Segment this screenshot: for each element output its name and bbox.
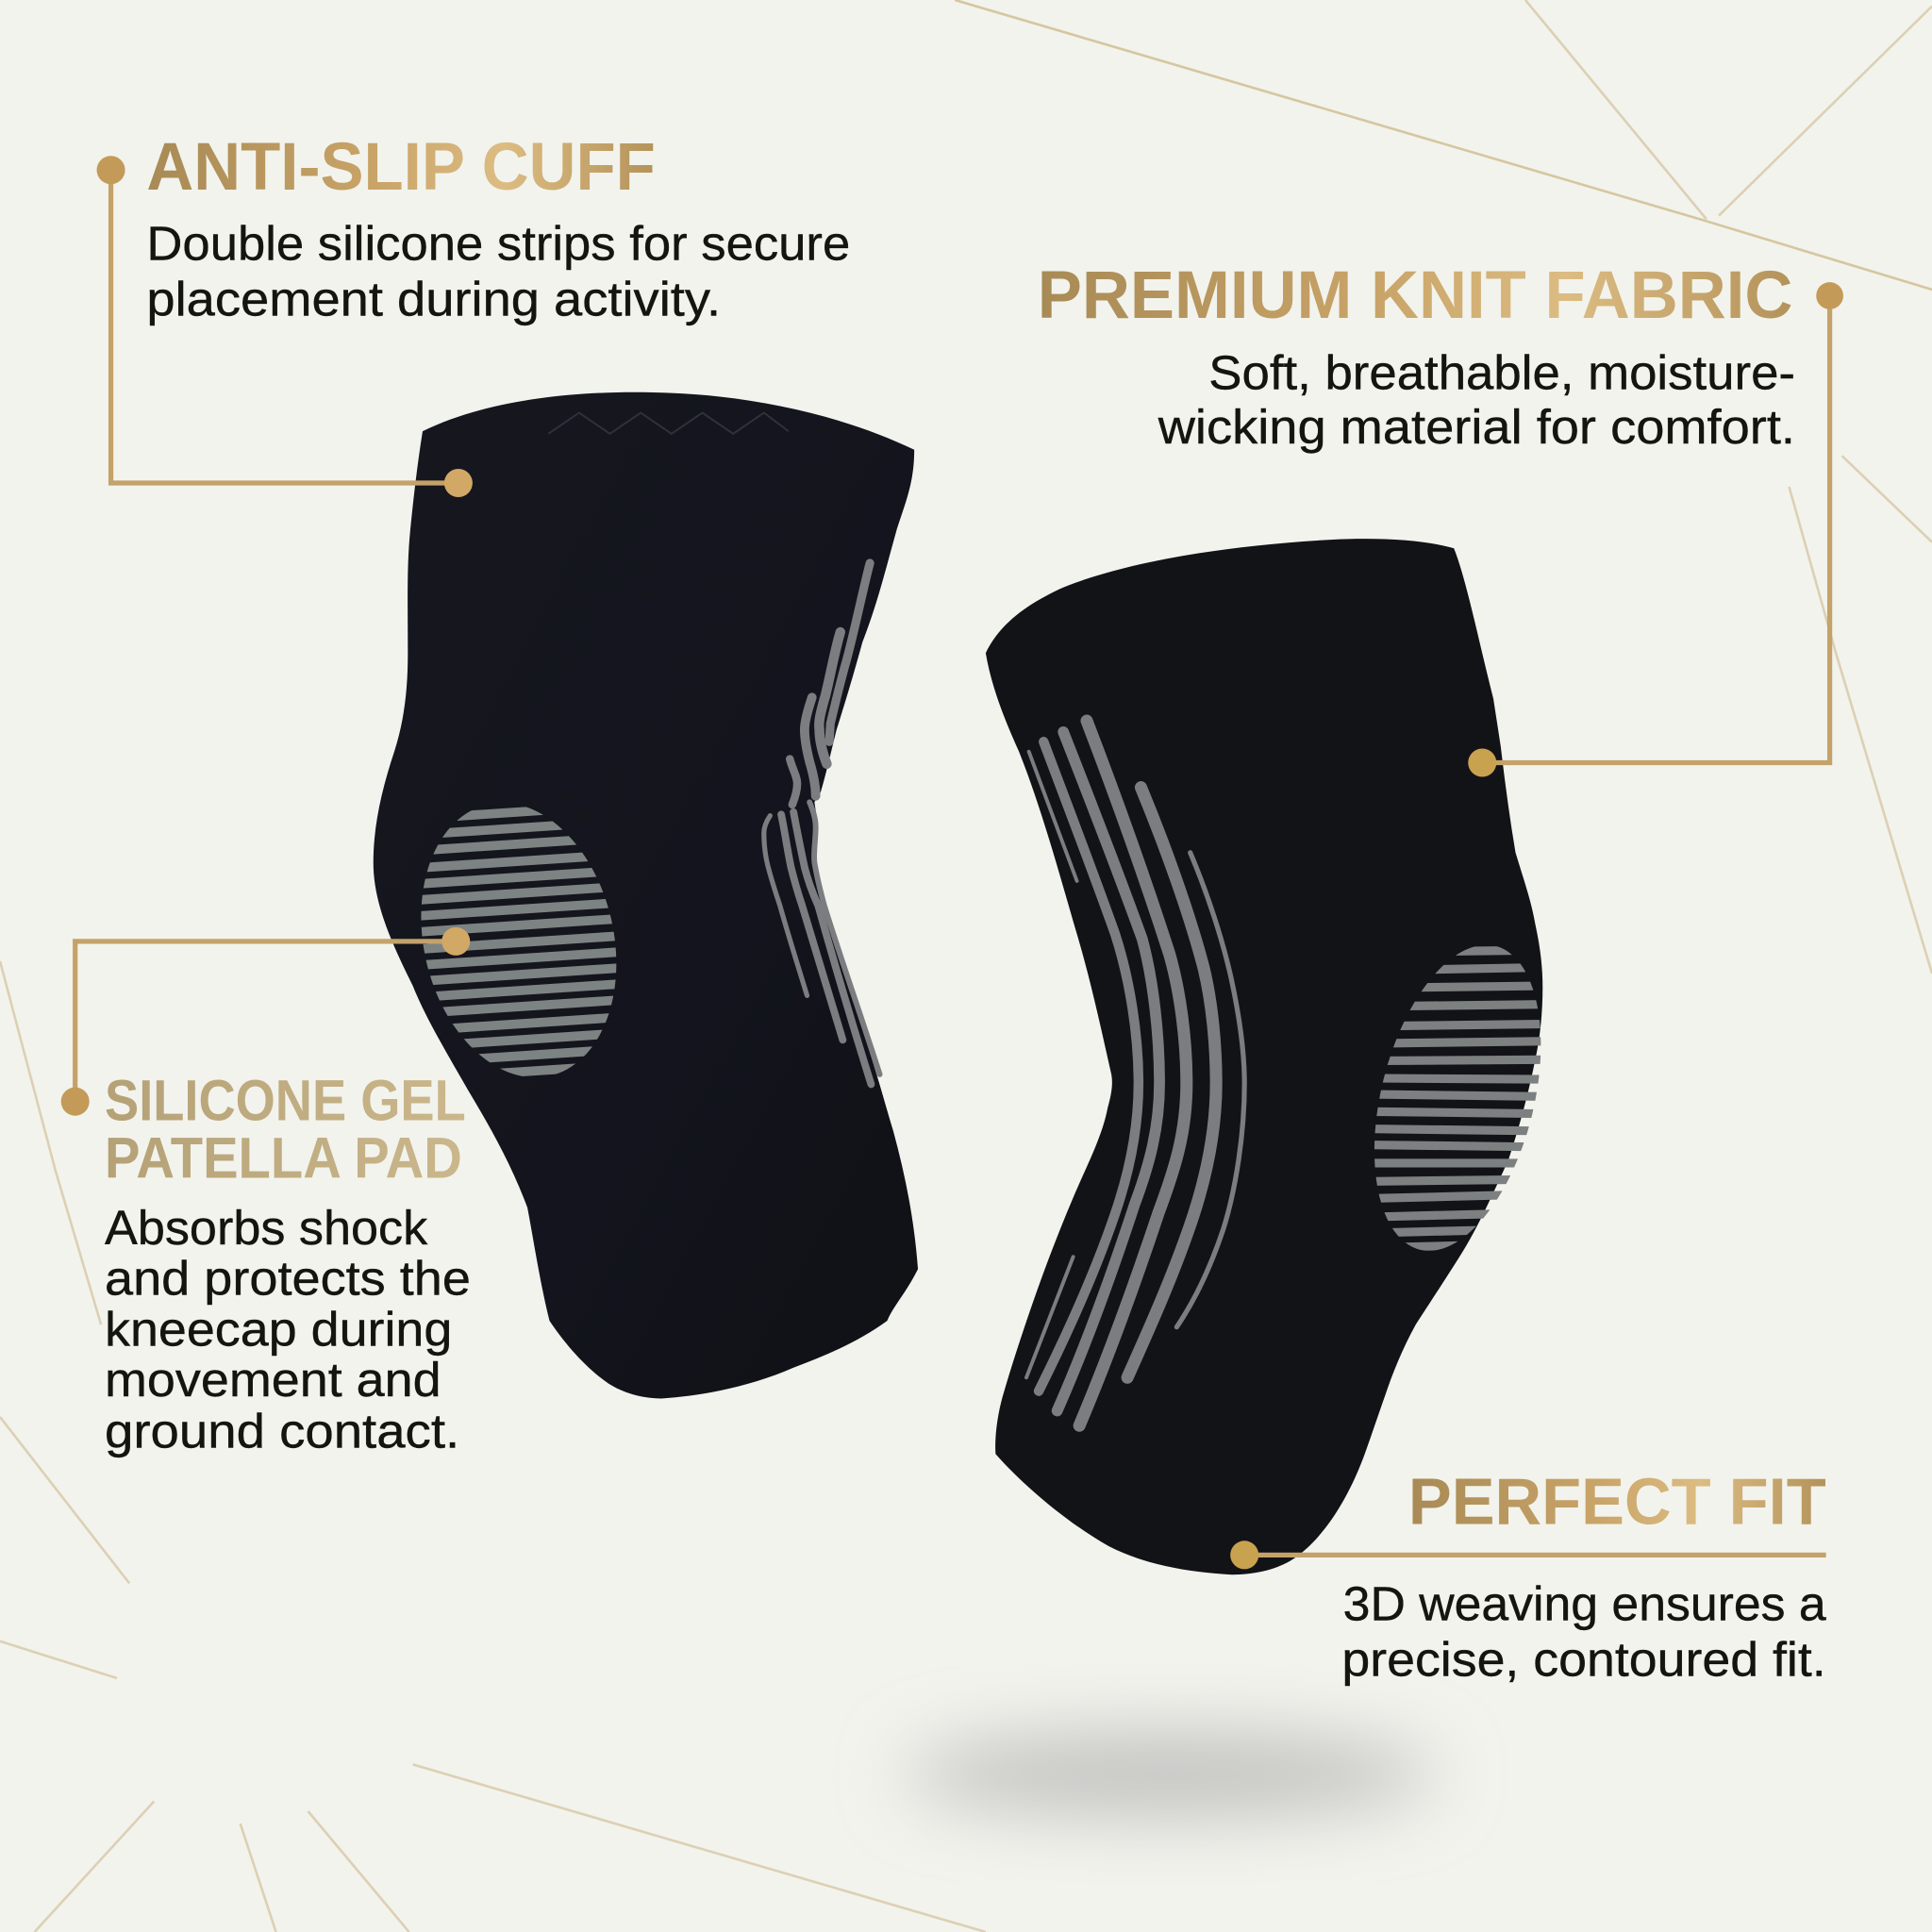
heading: anti-slip cuff: ANTI-SLIP CUFF bbox=[146, 129, 656, 205]
connector line: premium knit fabric bbox=[1482, 295, 1830, 762]
left sleeve grey support strands bbox=[764, 563, 880, 1084]
left sleeve patella pad bbox=[421, 807, 617, 1076]
right sleeve patella pad bbox=[1374, 946, 1541, 1251]
connector line: perfect fit bbox=[1244, 1553, 1826, 1557]
body: silicone gel patella pad: kneecap during bbox=[105, 1302, 452, 1356]
heading: premium knit fabric: PREMIUM KNIT FABRIC bbox=[1038, 258, 1792, 333]
left sleeve body bbox=[374, 392, 918, 1398]
connector line: silicone gel patella pad bbox=[75, 941, 456, 1102]
body: perfect fit: 3D weaving ensures a bbox=[1343, 1577, 1826, 1631]
connector line: anti-slip cuff bbox=[111, 170, 458, 483]
right knee sleeve bbox=[986, 539, 1553, 1574]
left knee sleeve bbox=[374, 392, 918, 1398]
body: premium knit fabric: Soft, breathable, moisture- bbox=[1208, 346, 1795, 400]
marker dots: anti-slip cuff bbox=[97, 156, 473, 497]
marker dots: premium knit fabric bbox=[1468, 282, 1843, 777]
marker dots: silicone gel patella pad bbox=[61, 927, 470, 1116]
callout: anti-slip cuff bbox=[97, 129, 850, 497]
body: silicone gel patella pad: Absorbs shock bbox=[105, 1201, 428, 1255]
callout: silicone gel patella pad bbox=[61, 927, 471, 1458]
marker dot: perfect fit bbox=[1230, 1541, 1258, 1569]
body: silicone gel patella pad: ground contact. bbox=[105, 1405, 459, 1458]
body: anti-slip cuff: Double silicone strips for secure bbox=[146, 217, 850, 271]
body: premium knit fabric: wicking material for comfort. bbox=[1158, 400, 1795, 454]
right sleeve grey support strands bbox=[1026, 721, 1244, 1425]
right sleeve body bbox=[986, 539, 1542, 1574]
callout: perfect fit bbox=[1230, 1465, 1826, 1686]
heading: silicone gel patella pad: PATELLA PAD bbox=[105, 1126, 462, 1191]
body: anti-slip cuff: placement during activity. bbox=[146, 272, 721, 325]
left sleeve cuff weave bbox=[548, 413, 789, 434]
callout: premium knit fabric bbox=[1038, 258, 1843, 777]
heading: silicone gel patella pad: SILICONE GEL bbox=[105, 1068, 466, 1133]
heading: perfect fit: PERFECT FIT bbox=[1408, 1465, 1826, 1539]
body: perfect fit: precise, contoured fit. bbox=[1341, 1632, 1826, 1686]
body: silicone gel patella pad: movement and bbox=[105, 1353, 441, 1407]
floor shadow bbox=[906, 1732, 1436, 1816]
body: silicone gel patella pad: and protects the bbox=[105, 1252, 471, 1306]
